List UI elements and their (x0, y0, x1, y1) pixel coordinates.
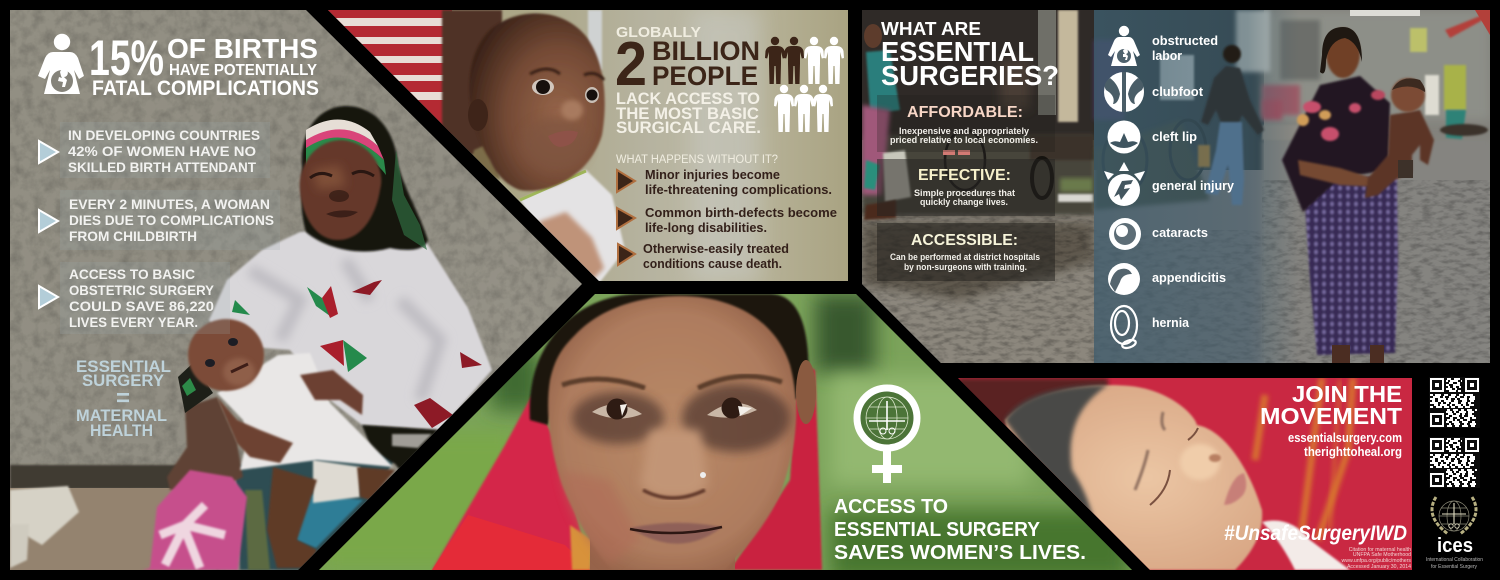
panel: what are essential surgeries (862, 10, 1490, 363)
right side buildings (1262, 10, 1490, 120)
photo: baby with striped cloth (328, 10, 848, 282)
panel: join the movement (958, 378, 1412, 570)
panel: two billion people lack access (328, 10, 848, 282)
face (300, 140, 381, 240)
icon list: clubfoot: clubfoot (1152, 85, 1204, 99)
card: affordable (877, 95, 1055, 152)
bullet: access could save lives: LIVES EVERY YEAR. (69, 314, 198, 330)
icon list: cataracts: cataracts (1152, 226, 1208, 240)
statistic: globally 2 billion people: THE MOST BASIC (616, 104, 759, 123)
logo: ICES emblem: ices (1437, 535, 1473, 557)
QR code: therighttoheal.org (1429, 437, 1480, 488)
bullet: skilled birth attendant: IN DEVELOPING COUNTRIES (68, 127, 260, 143)
card: effective: EFFECTIVE: (918, 167, 1011, 184)
lips (630, 523, 722, 544)
pictogram: people, two in seven dark (765, 37, 844, 132)
baby dress (217, 353, 393, 470)
heading: what are essential surgeries: SURGERIES? (881, 60, 1059, 91)
icon list: general injury (1104, 162, 1234, 206)
face (1005, 385, 1262, 570)
mother (1303, 177, 1398, 355)
hair (1005, 385, 1108, 525)
statistic: globally 2 billion people: LACK ACCESS TO (616, 89, 760, 108)
head (469, 13, 605, 191)
closed eyes and brows (1135, 412, 1165, 490)
citation: Citation for maternal health (1349, 547, 1411, 553)
bullet: access could save lives: ACCESS TO BASIC (69, 266, 195, 282)
heading: join the movement (1260, 381, 1402, 429)
hand (538, 212, 604, 282)
heading: 15% of births have potentially fatal complications: FATAL COMPLICATIONS (92, 76, 319, 100)
pink wrap (142, 470, 247, 570)
citation: www.unfpa.org/public/mothers (1342, 558, 1411, 564)
links: websites (1288, 430, 1402, 459)
subheading: what happens without it: WHAT HAPPENS WITHOUT IT? (616, 154, 778, 166)
citation (1342, 547, 1411, 570)
icon: female symbol with surgical globe (857, 388, 917, 483)
icon: pregnant woman (38, 34, 84, 94)
text: essential surgery equals maternal health: SURGERY (82, 371, 165, 390)
shawl (209, 225, 492, 430)
man walking (1201, 66, 1264, 135)
icon list: cleft lip (1108, 120, 1197, 154)
icon list: hernia (1111, 306, 1190, 349)
bullet: access could save lives: OBSTETRIC SURGERY (69, 282, 215, 298)
hair (530, 294, 809, 425)
icon list: cataracts (1109, 218, 1208, 250)
road (862, 284, 941, 363)
heading: join the movement: MOVEMENT (1260, 403, 1402, 429)
statistic: globally 2 billion people: SURGICAL CARE. (616, 118, 761, 137)
card: affordable: priced relative to local economies. (890, 135, 1038, 146)
consequence: birth defects: life-long disabilities. (645, 220, 767, 235)
message: access saves women's lives: ACCESS TO (834, 496, 948, 518)
nose (1180, 444, 1220, 480)
text: essential surgery equals maternal health: HEALTH (90, 421, 153, 440)
bystander with colourful wrap (864, 24, 882, 48)
face (548, 296, 796, 570)
neck (590, 530, 735, 570)
card: accessible: ACCESSIBLE: (911, 232, 1018, 249)
text: essential surgery equals maternal health (77, 360, 170, 436)
icon list: appendicitis: appendicitis (1152, 271, 1226, 285)
heading: what are essential surgeries: WHAT ARE (881, 19, 981, 39)
logo: ICES emblem: for Essential Surgery (1431, 564, 1477, 570)
baby head (188, 319, 264, 391)
consequence: untreated conditions: Otherwise-easily treated (643, 241, 789, 256)
bullet: every two minutes: FROM CHILDBIRTH (69, 228, 197, 244)
QR code: essentialsurgery.com (1429, 377, 1480, 428)
heading: join the movement: JOIN THE (1292, 381, 1402, 407)
icon list: general injury: general injury (1152, 179, 1234, 193)
heading: what are essential surgeries: ESSENTIAL (881, 36, 1034, 67)
bullet: access could save lives: COULD SAVE 86,220 (69, 298, 214, 314)
photo: close-up of a woman's face on green background (319, 294, 1139, 580)
heading: 15% of births have potentially fatal complications: OF BIRTHS (167, 33, 318, 64)
links: websites: essentialsurgery.com (1288, 430, 1402, 445)
consequence: untreated conditions (617, 242, 788, 268)
card: affordable: Inexpensive and appropriately (899, 126, 1030, 137)
panel: maternal statistics with mother and baby photo (10, 10, 590, 578)
blue list panel base (1094, 10, 1264, 170)
consequence: untreated conditions: conditions cause death. (643, 256, 782, 271)
icon list: obstructed labor (1108, 26, 1218, 66)
blue tint over list column (1094, 10, 1299, 363)
logo: ICES emblem: International Collaboration (1426, 557, 1483, 563)
bullet: access could save lives (39, 266, 215, 330)
shirt (520, 170, 625, 282)
icon list: cleft lip: cleft lip (1152, 130, 1197, 144)
hashtag: #UnsafeSurgeryIWD (1224, 522, 1407, 545)
card: accessible (877, 223, 1055, 281)
bullet backdrops (60, 122, 280, 334)
statistic: globally 2 billion people: BILLION (652, 36, 760, 66)
brows (562, 376, 782, 388)
baby legs and diaper (313, 460, 360, 503)
bullet: every two minutes (38, 200, 274, 241)
icon list: hernia: hernia (1152, 316, 1190, 330)
card: accessible: by non-surgeons with training. (904, 262, 1027, 273)
child in arms (1365, 110, 1434, 198)
adult arm and hand (167, 397, 243, 490)
bullet: skilled birth attendant (38, 130, 260, 172)
hijab (302, 106, 428, 252)
photo: mother holding baby against a concrete wall (10, 10, 590, 578)
citation: UNFPA Safe Motherhood (1353, 552, 1411, 558)
consequence: minor injuries: Minor injuries become (645, 167, 780, 182)
text: essential surgery equals maternal health: MATERNAL (76, 406, 167, 425)
dark shopfronts, left (862, 10, 1094, 140)
card: effective (877, 159, 1055, 216)
bullet: every two minutes: EVERY 2 MINUTES, A WOMAN (69, 196, 270, 212)
citation: Accessed January 30, 2014 (1347, 564, 1411, 570)
message: access saves women's lives: SAVES WOMEN’S LIVES. (834, 542, 1086, 564)
lips (1224, 473, 1246, 505)
heading: 15% of births have potentially fatal complications: 15% (89, 30, 164, 86)
bullet: every two minutes: DIES DUE TO COMPLICATIONS (69, 212, 274, 228)
statistic: globally 2 billion people: 2 (615, 30, 647, 99)
text: essential surgery equals maternal health: = (116, 385, 130, 412)
eye shadows (572, 392, 664, 444)
card: effective: Simple procedures that (914, 188, 1016, 199)
statistic: globally 2 billion people (615, 24, 761, 137)
consequence: birth defects (617, 205, 837, 235)
card: affordable: AFFORDABLE: (907, 104, 1023, 121)
white collar (1262, 520, 1350, 570)
heading: 15% of births have potentially fatal complications (91, 38, 318, 95)
text: essential surgery equals maternal health: ESSENTIAL (76, 357, 171, 376)
nose (640, 430, 708, 497)
icon list: obstructed labor: labor (1152, 49, 1182, 63)
skirt (235, 450, 400, 570)
heading: 15% of births have potentially fatal complications: HAVE POTENTIALLY (169, 62, 318, 79)
red scarf (432, 395, 590, 570)
icon list: appendicitis (1108, 263, 1226, 295)
statistic: globally 2 billion people: PEOPLE (652, 61, 758, 91)
bullet: skilled birth attendant: SKILLED BIRTH ATTENDANT (68, 159, 256, 175)
photo: sleeping newborn on red cloth (958, 378, 1412, 570)
bicycle and cart (945, 130, 985, 190)
statistic: globally 2 billion people: GLOBALLY (616, 24, 701, 41)
consequence: birth defects: Common birth-defects become (645, 205, 837, 220)
bullet: skilled birth attendant: 42% OF WOMEN HAVE NO (68, 143, 256, 159)
icon list: obstructed labor: obstructed (1152, 34, 1218, 48)
logo: ICES emblem (1426, 497, 1483, 570)
card: effective: quickly change lives. (920, 197, 1008, 208)
photo: street scene with mother and child (862, 10, 1490, 363)
message: access saves women's lives: ESSENTIAL SURGERY (834, 519, 1041, 541)
icon list: clubfoot (1104, 72, 1204, 112)
consequence: minor injuries: life-threatening complications. (645, 182, 832, 197)
message: access saves women's lives (834, 496, 1086, 564)
heading: what are essential surgeries (881, 19, 1059, 91)
consequence: minor injuries (617, 167, 832, 197)
links: websites: therighttoheal.org (1304, 444, 1402, 459)
eyes (592, 404, 642, 419)
panel: portrait of woman with access message (319, 294, 1139, 580)
card: accessible: Can be performed at district hospitals (890, 252, 1040, 263)
